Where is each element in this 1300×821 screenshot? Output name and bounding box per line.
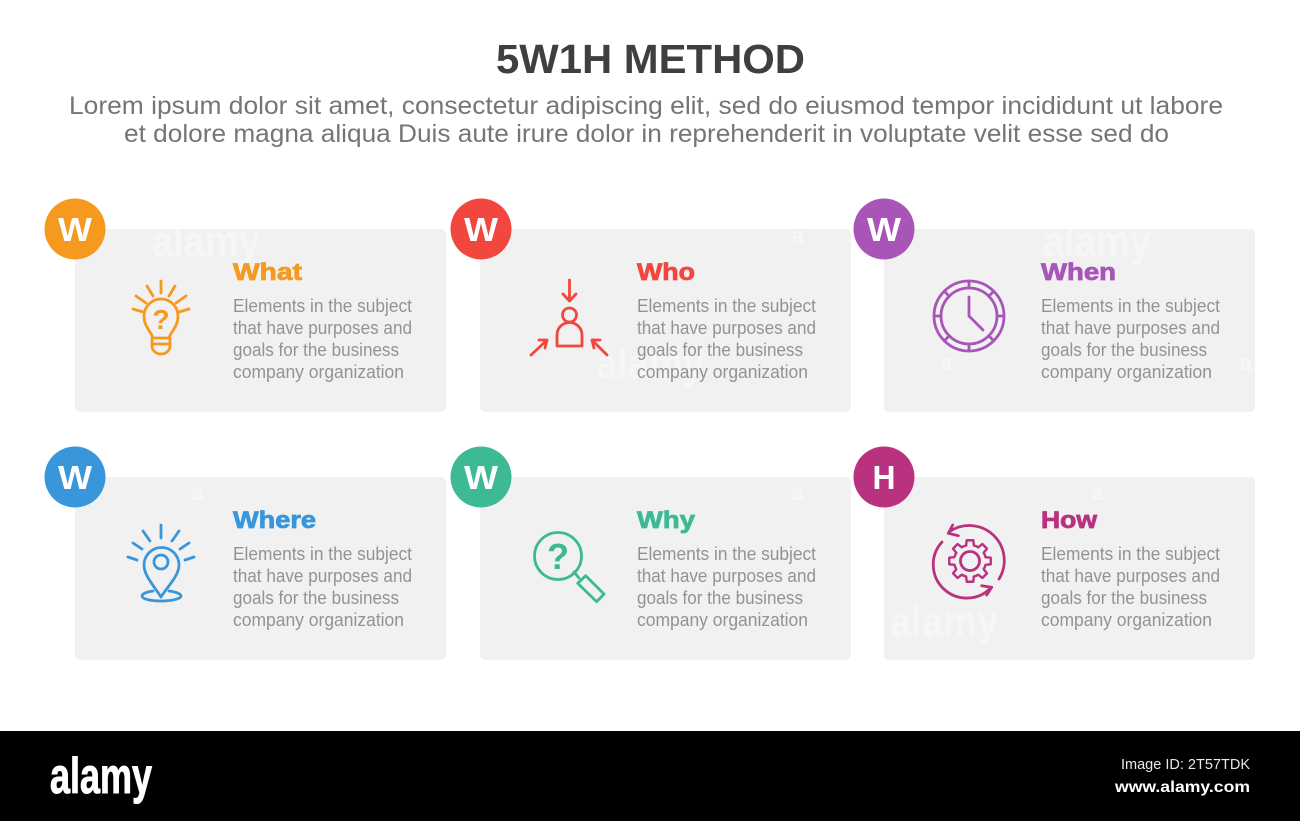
heading: where: Where <box>233 507 316 534</box>
panel: how: a <box>1091 480 1104 505</box>
description: what <box>233 296 412 382</box>
heading: what: What <box>233 259 302 286</box>
panel: why <box>450 446 851 660</box>
footer url: www.alamy.com <box>1114 779 1250 796</box>
heading: who: Who <box>637 259 695 286</box>
description: how <box>1041 544 1220 630</box>
footer logo: alamy <box>50 748 152 804</box>
badge: what <box>44 198 106 260</box>
description: what: that have purposes and <box>233 318 412 338</box>
badge: how: H <box>872 459 896 496</box>
description: where: company organization <box>233 610 404 630</box>
panel: when <box>854 198 1255 412</box>
icon: person with arrows <box>531 280 607 355</box>
panel: how <box>854 446 1255 660</box>
description: how: goals for the business <box>1041 588 1207 608</box>
description: who: that have purposes and <box>637 318 816 338</box>
panel: when: a <box>1240 350 1253 375</box>
icon: gear with cycle arrows <box>933 525 1004 598</box>
description: how: company organization <box>1041 610 1212 630</box>
panel: what: alamy <box>152 217 260 266</box>
heading: why: Why <box>637 507 696 534</box>
icon: location pin <box>128 525 194 601</box>
subtitle text block: Lorem ipsum dolor sit amet, consectetur adipiscing elit, sed do eiusmod tempor incididunt ut labore <box>69 92 1223 120</box>
description: what: company organization <box>233 362 404 382</box>
badge: where: W <box>58 459 93 496</box>
badge: who <box>450 198 512 260</box>
description: how: that have purposes and <box>1041 566 1220 586</box>
description: who: goals for the business <box>637 340 803 360</box>
subtitle text block <box>69 92 1223 148</box>
description: why: that have purposes and <box>637 566 816 586</box>
description: who <box>637 296 816 382</box>
image id: Image ID: 2T57TDK <box>1121 756 1250 773</box>
heading: how: How <box>1041 507 1097 534</box>
panel: how: alamy <box>890 597 998 646</box>
panel: where <box>44 446 446 660</box>
heading: when: When <box>1041 259 1116 286</box>
badge: why: W <box>464 459 499 496</box>
description: who: company organization <box>637 362 808 382</box>
badge: what: W <box>58 211 93 248</box>
title: 5W1H METHOD <box>496 36 805 82</box>
description: why: company organization <box>637 610 808 630</box>
description: how: Elements in the subject <box>1041 544 1220 564</box>
icon: light bulb with question mark: ? <box>152 304 170 335</box>
icon: magnifier with question mark: ? <box>547 536 569 577</box>
description: why <box>637 544 816 630</box>
description: when: Elements in the subject <box>1041 296 1220 316</box>
description: why: goals for the business <box>637 588 803 608</box>
panel: where: a <box>191 480 204 505</box>
badge: when <box>854 198 914 260</box>
description: when: goals for the business <box>1041 340 1207 360</box>
description: who: Elements in the subject <box>637 296 816 316</box>
description: when: company organization <box>1041 362 1212 382</box>
badge: who: W <box>464 211 499 248</box>
footer bar <box>0 731 1300 821</box>
description: when: that have purposes and <box>1041 318 1220 338</box>
panel: who: a <box>792 223 805 248</box>
panel: why: a <box>791 480 804 505</box>
panel: what <box>44 198 446 412</box>
description: where: that have purposes and <box>233 566 412 586</box>
badge: how <box>854 446 914 508</box>
subtitle text block: et dolore magna aliqua Duis aute irure dolor in reprehenderit in voluptate velit esse sed do <box>124 120 1169 148</box>
description: what: goals for the business <box>233 340 399 360</box>
badge: where <box>44 446 106 508</box>
panel: who <box>450 198 851 412</box>
panel: who: alamy <box>596 339 704 388</box>
description: where: goals for the business <box>233 588 399 608</box>
panel: when: a <box>940 350 953 375</box>
description: where: Elements in the subject <box>233 544 412 564</box>
badge: when: W <box>867 211 902 248</box>
badge: why <box>450 446 512 508</box>
description: where <box>233 544 412 630</box>
icon: clock <box>934 281 1004 351</box>
description: what: Elements in the subject <box>233 296 412 316</box>
description: why: Elements in the subject <box>637 544 816 564</box>
icon: light bulb with question mark <box>133 281 189 354</box>
panel: when: alamy <box>1043 217 1151 266</box>
description: when <box>1041 296 1220 382</box>
icon: magnifier with question mark <box>534 532 604 602</box>
